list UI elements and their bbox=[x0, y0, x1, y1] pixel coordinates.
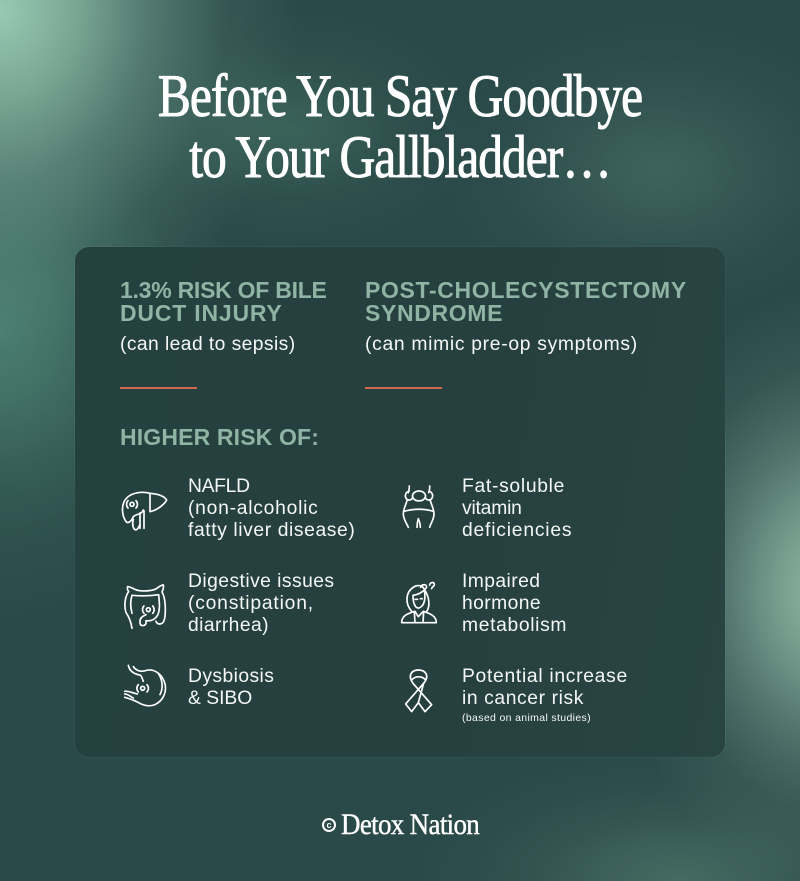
title: to Your Gallbladder… bbox=[189, 124, 611, 190]
text: dysbiosis: & SIBO bbox=[188, 688, 252, 709]
icon: liver bbox=[122, 492, 167, 530]
text: NAFLD: NAFLD bbox=[188, 476, 250, 497]
icon: stomach bbox=[125, 665, 165, 706]
logo: Detox Nation bbox=[322, 808, 480, 841]
text: footnote: (based on animal studies) bbox=[462, 712, 591, 724]
icon: waist bbox=[403, 486, 434, 527]
heading: post-cholecystectomy syndrome: SYNDROME bbox=[365, 300, 503, 326]
heading: bile duct injury bbox=[120, 277, 327, 326]
divider left bbox=[120, 387, 197, 389]
text: hormone metabolism bbox=[462, 571, 567, 636]
text: pre-op symptoms note: (can mimic pre-op symptoms) bbox=[365, 334, 638, 355]
text: NAFLD: fatty liver disease) bbox=[188, 520, 355, 541]
text: digestive issues bbox=[188, 571, 335, 636]
text: digestive issues: (constipation, bbox=[188, 593, 314, 614]
text: hormone metabolism: hormone bbox=[462, 593, 541, 614]
heading: bile duct injury: 1.3% RISK OF BILE bbox=[120, 277, 327, 303]
text: hormone metabolism: metabolism bbox=[462, 615, 567, 636]
heading: higher risk of: HIGHER RISK OF: bbox=[120, 424, 319, 450]
text: digestive issues: Digestive issues bbox=[188, 571, 335, 592]
heading: post-cholecystectomy syndrome bbox=[365, 277, 687, 326]
text: digestive issues: diarrhea) bbox=[188, 615, 269, 636]
title: Before You Say Goodbye bbox=[158, 63, 642, 129]
text: dysbiosis bbox=[188, 666, 274, 709]
text: sepsis note: (can lead to sepsis) bbox=[120, 334, 296, 355]
logo mark: c bbox=[326, 820, 332, 830]
text: cancer risk: Potential increase bbox=[462, 666, 628, 687]
divider right bbox=[365, 387, 442, 389]
text: vitamin deficiencies bbox=[462, 476, 572, 541]
title bbox=[158, 63, 642, 190]
text: vitamin deficiencies: vitamin bbox=[462, 498, 522, 519]
text: cancer risk bbox=[462, 666, 628, 709]
logo wordmark: Detox Nation bbox=[341, 808, 479, 841]
icon: confused woman bbox=[402, 582, 436, 623]
icon: intestines bbox=[125, 585, 165, 628]
heading: bile duct injury: DUCT INJURY bbox=[120, 300, 283, 326]
text: NAFLD: (non-alcoholic bbox=[188, 498, 319, 519]
text: cancer risk: in cancer risk bbox=[462, 688, 584, 709]
heading: post-cholecystectomy syndrome: POST-CHOLECYSTECTOMY bbox=[365, 277, 687, 303]
logo mark bbox=[322, 818, 336, 832]
text: vitamin deficiencies: deficiencies bbox=[462, 520, 572, 541]
text: hormone metabolism: Impaired bbox=[462, 571, 540, 592]
text: NAFLD bbox=[188, 476, 355, 541]
text: vitamin deficiencies: Fat-soluble bbox=[462, 476, 565, 497]
text: dysbiosis: Dysbiosis bbox=[188, 666, 274, 687]
panel: risks card bbox=[75, 247, 725, 757]
icon: ribbon bbox=[406, 670, 432, 712]
